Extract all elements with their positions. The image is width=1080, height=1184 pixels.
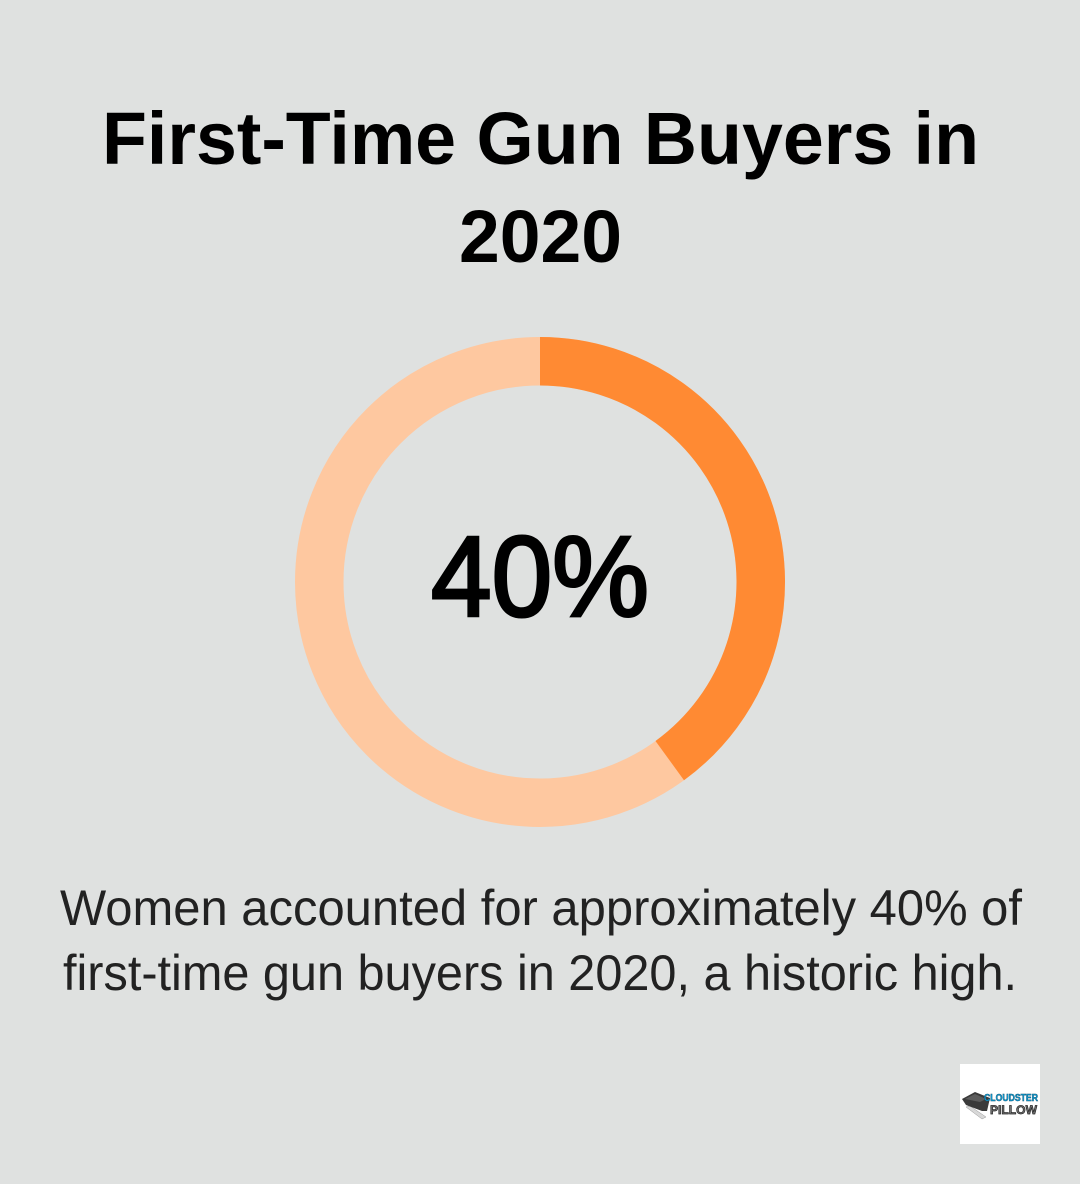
icon: pillow [962,1092,990,1119]
logo: Cloudster Pillow: PILLOW [990,1103,1038,1117]
highlighted 40% ring segment [540,361,761,761]
title: First-Time Gun Buyers in [102,97,979,180]
description text [60,880,1022,1001]
description text: first-time gun buyers in 2020, a historic high. [63,945,1017,1001]
title [102,97,979,278]
center value: 40% [431,514,649,641]
donut chart: 40% [319,361,761,803]
logo wordmark: CLOUDSTER [984,1093,1039,1104]
logo: Cloudster Pillow [960,1064,1040,1144]
remaining 60% ring segment [319,361,761,803]
title: 2020 [459,195,622,278]
description text: Women accounted for approximately 40% of [60,880,1022,936]
